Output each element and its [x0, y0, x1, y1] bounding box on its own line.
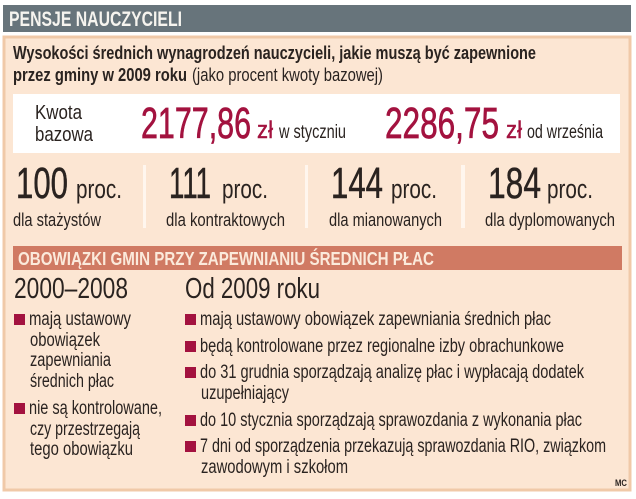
stat: 111 proc.: dla kontraktowych	[166, 209, 285, 230]
stat: 100 proc.	[13, 159, 122, 230]
bullet: not controlled: tego obowiązku	[30, 439, 133, 460]
column heading: 2000–2008	[14, 273, 128, 305]
heading: subtitle	[13, 42, 536, 85]
amount: January: w styczniu	[278, 122, 346, 143]
bullet: statutory duty: średnich płac	[30, 371, 114, 392]
stat: 144 proc.	[329, 159, 442, 230]
amount: September: zł	[506, 117, 523, 144]
bullet 3: uzupełniający	[201, 383, 289, 404]
stat: 100 proc.: proc.	[76, 174, 122, 204]
header bar	[3, 5, 631, 32]
stat: 111 proc.: 111	[169, 159, 211, 208]
label: kwota bazowa: bazowa	[35, 124, 94, 146]
bullet 5: zawodowym i szkołom	[201, 457, 348, 478]
column: 2000-2008	[14, 273, 162, 460]
column: from 2009	[185, 273, 606, 478]
amount: September: od września	[527, 122, 603, 143]
heading: subtitle: (jako procent kwoty bazowej)	[192, 64, 383, 85]
bullet: statutory duty: obowiązek	[30, 330, 100, 351]
bullet 3	[185, 362, 584, 404]
stat: 144 proc.: dla mianowanych	[329, 209, 442, 230]
column heading: Od 2009 roku	[185, 273, 320, 305]
panel: base amount	[13, 94, 620, 153]
bullet: not controlled	[14, 398, 162, 460]
title: PENSJE NAUCZYCIELI	[9, 8, 182, 31]
label: kwota bazowa: Kwota	[35, 102, 83, 124]
stat: 100 proc.: dla stażystów	[13, 209, 102, 230]
bullet: statutory duty	[14, 309, 131, 392]
stat: 111 proc.	[166, 159, 285, 230]
stat: 184 proc.: proc.	[547, 174, 593, 204]
stat: 184 proc.	[485, 159, 615, 230]
section heading bar: OBOWIĄZKI GMIN PRZY ZAPEWNIANIU ŚREDNICH PŁAC	[18, 248, 434, 269]
label: kwota bazowa	[35, 102, 94, 146]
bullet: statutory duty: mają ustawowy	[29, 309, 131, 330]
amount: September: 2286,75	[385, 99, 499, 148]
bullet: statutory duty: zapewniania	[30, 350, 111, 371]
amount: January: zł	[257, 117, 274, 144]
heading: subtitle: przez gminy w 2009 roku	[13, 64, 187, 85]
stat: 184 proc.: 184	[488, 159, 541, 208]
bullet: not controlled: czy przestrzegają	[30, 419, 140, 440]
stat: 111 proc.: proc.	[222, 174, 268, 204]
stat: 144 proc.: proc.	[391, 174, 437, 204]
bullet 5	[185, 436, 606, 478]
stat: 144 proc.: 144	[331, 159, 383, 208]
bullet: not controlled: nie są kontrolowane,	[29, 398, 162, 419]
amount: January: 2177,86	[141, 99, 251, 148]
credit: MC	[615, 478, 627, 488]
stat: 100 proc.: 100	[16, 159, 68, 208]
